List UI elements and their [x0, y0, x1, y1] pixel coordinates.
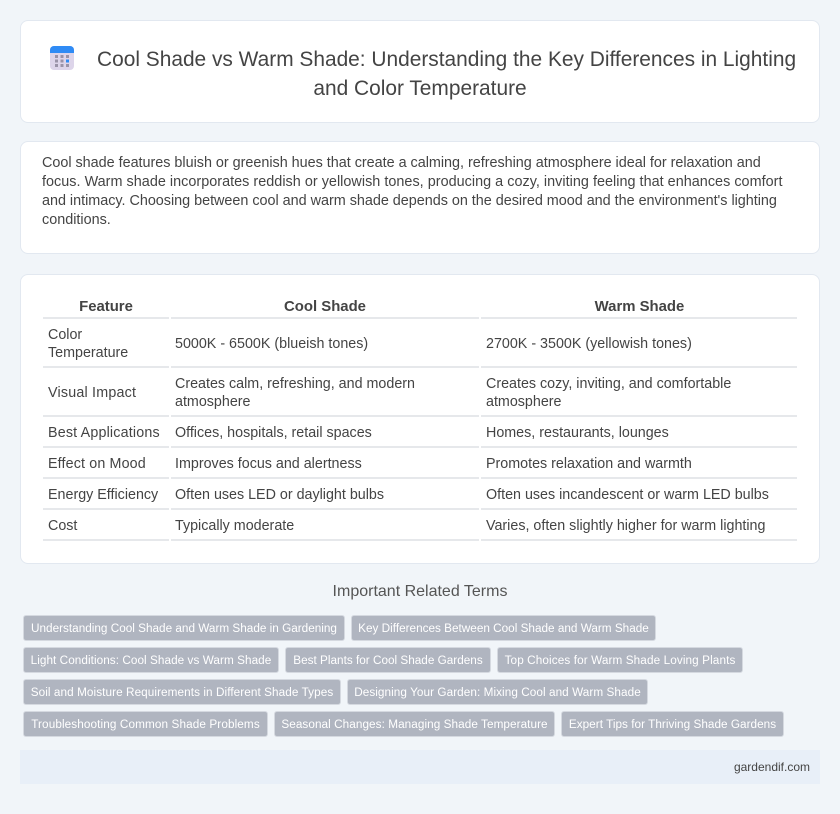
icon: calendar: [50, 46, 74, 70]
table header and rows: Temperature: [48, 345, 128, 361]
table header and rows: Creates calm, refreshing, and modern: [175, 376, 415, 392]
title: Cool Shade vs Warm Shade: Understanding the Key Differences in Lighting: [97, 48, 796, 71]
table header and rows: Cost: [48, 518, 77, 534]
table header and rows: Often uses incandescent or warm LED bulbs: [486, 487, 769, 503]
title: [97, 48, 796, 100]
related term tags: Expert Tips for Thriving Shade Gardens: [569, 718, 776, 731]
table header and rows: Offices, hospitals, retail spaces: [175, 425, 372, 441]
related term tags: Troubleshooting Common Shade Problems: [31, 718, 260, 731]
intro text: focus. Warm shade incorporates reddish or yellowish tones, producing a cozy, inviting feeling that enhances comfort: [42, 174, 782, 190]
table header and rows: [43, 299, 797, 541]
table header and rows: Improves focus and alertness: [175, 456, 362, 472]
related term tags: [23, 615, 784, 737]
related term tags: Top Choices for Warm Shade Loving Plants: [505, 654, 735, 667]
table header and rows: Warm Shade: [595, 299, 684, 315]
table header and rows: Visual Impact: [48, 385, 136, 401]
table header and rows: 5000K - 6500K (blueish tones): [175, 336, 368, 352]
intro panel: [20, 141, 820, 254]
intro text: Cool shade features bluish or greenish hues that create a calming, refreshing atmosphere ideal for relaxation and: [42, 155, 761, 171]
related term tags: Light Conditions: Cool Shade vs Warm Shade: [31, 654, 271, 667]
related term tags: Designing Your Garden: Mixing Cool and Warm Shade: [354, 686, 641, 699]
comparison table panel: [20, 274, 820, 564]
footer source text: gardendif.com: [734, 760, 810, 774]
intro text: conditions.: [42, 212, 111, 228]
table header and rows: Best Applications: [48, 425, 160, 441]
title: and Color Temperature: [313, 77, 527, 100]
table header and rows: Feature: [79, 299, 133, 315]
table header and rows: Often uses LED or daylight bulbs: [175, 487, 384, 503]
related term tags: Understanding Cool Shade and Warm Shade in Gardening: [31, 622, 337, 635]
table header and rows: atmosphere: [175, 394, 250, 410]
table header and rows: 2700K - 3500K (yellowish tones): [486, 336, 692, 352]
header card: [20, 20, 820, 123]
related term tags: Soil and Moisture Requirements in Different Shade Types: [31, 686, 333, 699]
related terms heading: Important Related Terms: [333, 583, 507, 600]
related term tags: Best Plants for Cool Shade Gardens: [293, 654, 483, 667]
table header and rows: Color: [48, 327, 82, 343]
table header and rows: Creates cozy, inviting, and comfortable: [486, 376, 731, 392]
table header and rows: Typically moderate: [175, 518, 294, 534]
table header and rows: Cool Shade: [284, 299, 366, 315]
intro text: and intimacy. Choosing between cool and warm shade depends on the desired mood and the environment's lighting: [42, 193, 777, 209]
related term tags: Seasonal Changes: Managing Shade Temperature: [281, 718, 548, 731]
table header and rows: atmosphere: [486, 394, 562, 410]
table header and rows: Effect on Mood: [48, 456, 146, 472]
table header and rows: Varies, often slightly higher for warm lighting: [486, 518, 765, 534]
intro text: [42, 155, 782, 228]
table header and rows: Energy Efficiency: [48, 487, 158, 503]
table header and rows: Promotes relaxation and warmth: [486, 456, 692, 472]
table header and rows: Homes, restaurants, lounges: [486, 425, 669, 441]
footer bar: [20, 750, 820, 784]
related term tags: Key Differences Between Cool Shade and Warm Shade: [358, 622, 649, 635]
